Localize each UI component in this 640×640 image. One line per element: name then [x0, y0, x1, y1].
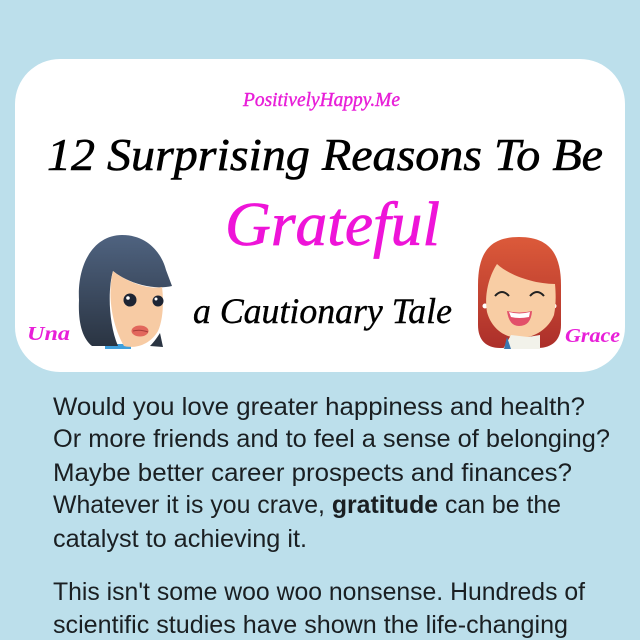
- text block: second paragraph: scientific studies have shown the life-changing: [53, 611, 568, 639]
- text block: intro paragraph: [53, 393, 610, 553]
- text block: intro paragraph: Or more friends and to feel a sense of belonging?: [53, 425, 610, 453]
- panel: header card: [15, 59, 625, 372]
- title: 12 Surprising Reasons To Be: [47, 129, 603, 180]
- label: Grace: Grace: [565, 325, 620, 347]
- site name: PositivelyHappy.Me: [242, 89, 400, 111]
- heading: Grateful: Grateful: [225, 191, 440, 259]
- icon: Una character: [79, 235, 172, 349]
- icon: Grace character: [478, 237, 561, 349]
- label: Una: Una: [27, 323, 70, 345]
- text block: intro paragraph: Whatever it is you crave, gratitude can be the: [53, 491, 561, 519]
- subtitle: a Cautionary Tale: [193, 291, 452, 331]
- text block: second paragraph: [53, 578, 585, 639]
- text block: intro paragraph: catalyst to achieving it.: [53, 525, 307, 553]
- text block: second paragraph: This isn't some woo woo nonsense. Hundreds of: [53, 578, 585, 606]
- text block: intro paragraph: Maybe better career prospects and finances?: [53, 459, 572, 487]
- text block: intro paragraph: Would you love greater happiness and health?: [53, 393, 585, 421]
